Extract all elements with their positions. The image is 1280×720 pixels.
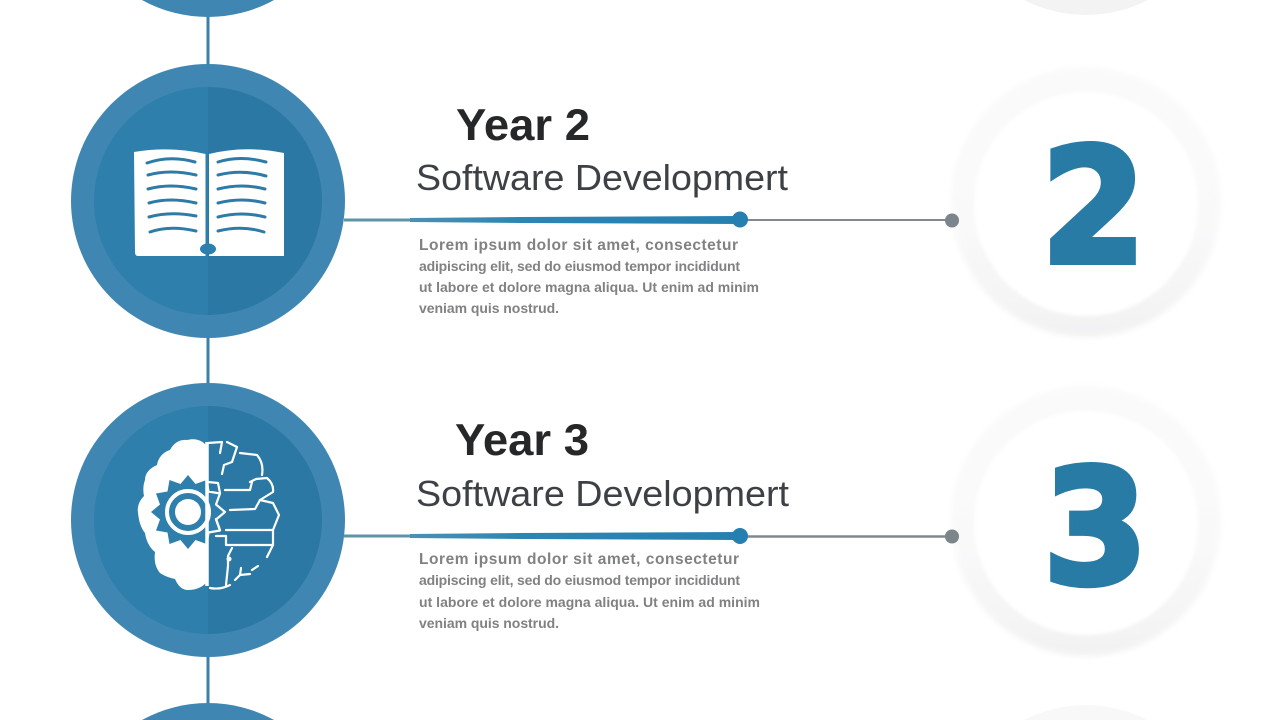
top partial blue circle: [142, 0, 274, 17]
year 3 description: [419, 551, 760, 631]
row: year 2: [71, 64, 1221, 338]
year 2 subtitle: Software Developmert: [416, 157, 788, 198]
year 3 icon circle: [71, 383, 345, 657]
year 3 subtitle: Software Developmert: [416, 473, 789, 514]
year 3 connector line with markers: [344, 528, 959, 544]
icon: brain with gear and circuits: [138, 439, 279, 590]
year 3 number circle: [951, 386, 1221, 656]
year 2 description: adipiscing elit, sed do eiusmod tempor incididunt: [419, 258, 740, 274]
bottom partial number circle: [1024, 705, 1148, 720]
year 3 description: adipiscing elit, sed do eiusmod tempor incididunt: [419, 572, 740, 588]
year 3 description: Lorem ipsum dolor sit amet, consectetur: [419, 551, 739, 568]
year 3 number circle: 3: [1043, 435, 1148, 621]
bottom partial blue circle: [142, 703, 274, 720]
year 2 description: [419, 237, 759, 316]
icon: open book: [134, 149, 284, 256]
year 2 connector line with markers: [344, 212, 959, 228]
year 2 number circle: [951, 67, 1221, 337]
year 3 heading: Year 3: [455, 416, 589, 465]
year 2 description: veniam quis nostrud.: [419, 300, 559, 316]
year 3 description: veniam quis nostrud.: [419, 615, 559, 631]
vertical timeline connector: [206, 10, 210, 710]
row: year 3: [71, 383, 1221, 657]
year 2 description: ut labore et dolore magna aliqua. Ut enim ad minim: [419, 279, 759, 295]
year 2 number circle: 2: [1041, 114, 1146, 300]
year 2 heading: Year 2: [456, 101, 590, 150]
year 2 description: Lorem ipsum dolor sit amet, consectetur: [419, 237, 738, 254]
year 3 description: ut labore et dolore magna aliqua. Ut enim ad minim: [419, 594, 760, 610]
year 2 icon circle: [71, 64, 345, 338]
top partial number circle: [1024, 0, 1148, 15]
